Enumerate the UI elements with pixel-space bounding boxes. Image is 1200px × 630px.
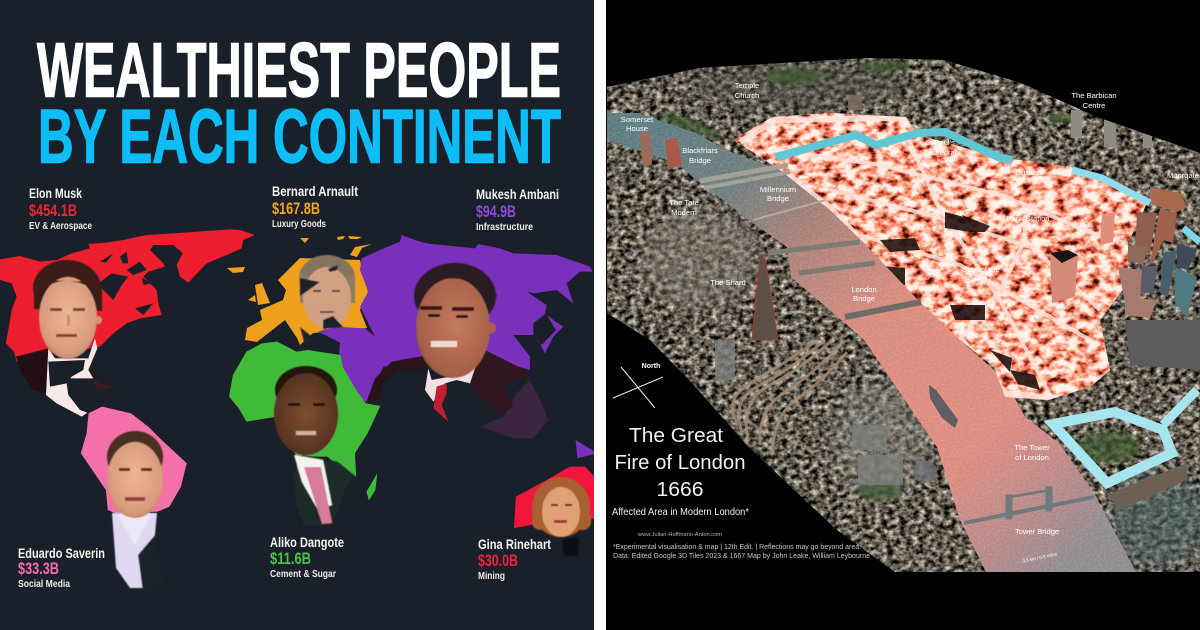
label: bernard arnault: $167.8B — [272, 200, 320, 218]
map labels: London — [851, 285, 877, 294]
elon suit — [16, 348, 48, 393]
portrait: elon musk — [33, 260, 102, 359]
footnote: *Experimental visualisation & map | 12th Edit. | Reflections may go beyond area. — [613, 544, 861, 551]
bridge: tower — [964, 487, 1094, 523]
label: elon musk — [29, 185, 92, 232]
gulf of mexico cut — [48, 360, 85, 387]
continent: asia — [318, 235, 593, 438]
title: the great fire of london 1666: The Great — [629, 425, 723, 447]
elon shirt — [46, 338, 97, 417]
map labels: Bridge — [767, 194, 789, 203]
panel: wealthiest people by continent — [0, 0, 601, 630]
ambani tie — [433, 383, 448, 422]
bridge: blackfriars — [700, 165, 790, 188]
cyan roman wall: north — [776, 132, 1012, 160]
thames east bank: st katharine docks — [1107, 463, 1187, 510]
label: elon musk: $454.1B — [29, 202, 77, 220]
website credit: www.Julian-Hoffmann-Anton.com — [637, 532, 722, 538]
bridge: london — [845, 302, 921, 317]
continent: north america — [0, 229, 255, 417]
label: eduardo saverin: Social Media — [18, 579, 70, 590]
map labels: Centre — [1083, 101, 1105, 110]
label: mukesh ambani — [476, 189, 558, 230]
walkie talkie tower — [1050, 253, 1078, 303]
continent: africa — [229, 342, 380, 501]
map labels: Bridge — [689, 156, 711, 165]
compass: north: North — [642, 363, 660, 370]
portrait: aliko dangote — [274, 366, 354, 525]
label: elon musk: EV & Aerospace — [29, 221, 92, 232]
barbican towers — [1071, 110, 1152, 148]
map labels: Millennium — [760, 185, 796, 194]
bridge: millennium — [753, 200, 826, 220]
label: aliko dangote: Cement & Sugar — [270, 569, 336, 580]
river thames — [606, 100, 1146, 580]
map labels: Start of the — [962, 265, 1000, 274]
label: bernard arnault — [272, 183, 358, 230]
map labels — [621, 81, 1199, 564]
hms belfast ship — [929, 385, 958, 428]
portrait: bernard arnault — [299, 255, 355, 345]
title: wealthiest people by each continent: WEALTHIEST PEOPLE — [37, 28, 561, 114]
london bridge station — [732, 340, 847, 455]
islands: indonesia — [576, 440, 594, 458]
bridge: cannon street — [799, 263, 875, 273]
map labels: Modern — [671, 208, 697, 217]
cyan wall: tower of london loop — [1053, 390, 1197, 483]
cyan wall: right edge — [1183, 228, 1200, 242]
southeast asia shadow — [480, 380, 548, 438]
map labels: 0.5 km / 0.3 miles — [1022, 551, 1058, 564]
label: gina rinehart — [478, 536, 551, 582]
continent: south america — [81, 407, 187, 513]
label: eduardo saverin: Eduardo Saverin — [18, 545, 105, 561]
label: mukesh ambani: Mukesh Ambani — [476, 186, 559, 202]
map labels: Moorgate — [1167, 171, 1199, 180]
map labels: The Barbican — [1071, 91, 1117, 100]
map labels: Bridge — [853, 294, 875, 303]
map labels: The Tate — [669, 198, 699, 207]
city towers cluster — [1100, 187, 1200, 370]
map labels: Fire — [974, 274, 988, 283]
label: eduardo saverin: $33.3B — [18, 560, 59, 578]
map labels: Blackfriars — [682, 146, 718, 155]
title: the great fire of london 1666: Fire of London — [614, 452, 746, 474]
portrait: mukesh ambani — [414, 263, 497, 378]
footnote: Data: Edited Google 3D Tiles 2023 & 1667 Map by John Leake, William Leybourne — [613, 553, 870, 560]
map labels: Somerset — [621, 115, 654, 124]
map labels: The Shard — [710, 278, 746, 287]
riverside towers — [640, 95, 862, 170]
portrait: gina rinehart — [532, 477, 591, 556]
continent: europe — [227, 236, 372, 345]
title: the great fire of london 1666: 1666 — [656, 479, 704, 501]
continent: australia — [514, 467, 601, 528]
title: wealthiest people by each continent — [36, 42, 561, 164]
portrait: eduardo saverin — [107, 431, 165, 592]
map labels: of London — [1015, 453, 1049, 462]
label: eduardo saverin — [18, 548, 104, 587]
label: mukesh ambani: Infrastructure — [476, 222, 533, 233]
south bank buildings — [715, 340, 937, 485]
tower top shadow — [1050, 250, 1078, 263]
subtitle: Affected Area in Modern London* — [612, 507, 749, 518]
label: gina rinehart: $30.0B — [478, 552, 518, 570]
map labels: The Tower — [1014, 443, 1050, 452]
map labels: Temple — [735, 81, 759, 90]
label: aliko dangote — [270, 534, 344, 580]
the shard — [752, 258, 778, 340]
map labels: House — [626, 124, 648, 133]
label: mukesh ambani: $94.9B — [476, 203, 516, 221]
label: aliko dangote: $11.6B — [270, 550, 311, 568]
map labels: Guildhall — [1015, 168, 1045, 177]
panel: great fire of london — [606, 0, 1200, 630]
title: wealthiest people by each continent: BY EACH CONTINENT — [38, 94, 561, 180]
green parks — [656, 60, 1141, 500]
3d city map — [606, 50, 1200, 580]
tonal areas of the city — [640, 63, 1200, 570]
fire affected area — [730, 105, 1150, 405]
cyan roman wall: east — [1072, 170, 1150, 203]
map labels: Church — [735, 91, 759, 100]
ambani suit — [367, 355, 428, 402]
label: aliko dangote: Aliko Dangote — [270, 534, 344, 550]
map labels: St Paul's — [925, 138, 955, 147]
map labels: Bank Station — [1006, 214, 1050, 223]
label: gina rinehart: Mining — [478, 571, 505, 582]
map labels: Tower Bridge — [1015, 527, 1059, 536]
label: bernard arnault: Bernard Arnault — [272, 183, 358, 199]
ambani shirt — [425, 366, 476, 402]
footnote — [613, 544, 870, 560]
label: bernard arnault: Luxury Goods — [272, 219, 326, 230]
label: elon musk: Elon Musk — [29, 185, 82, 201]
label: gina rinehart: Gina Rinehart — [478, 536, 551, 552]
title: the great fire of london 1666 — [614, 425, 746, 501]
map labels: Cathedral — [924, 148, 957, 157]
compass: north — [613, 363, 663, 408]
bridge: southwark — [768, 242, 860, 253]
